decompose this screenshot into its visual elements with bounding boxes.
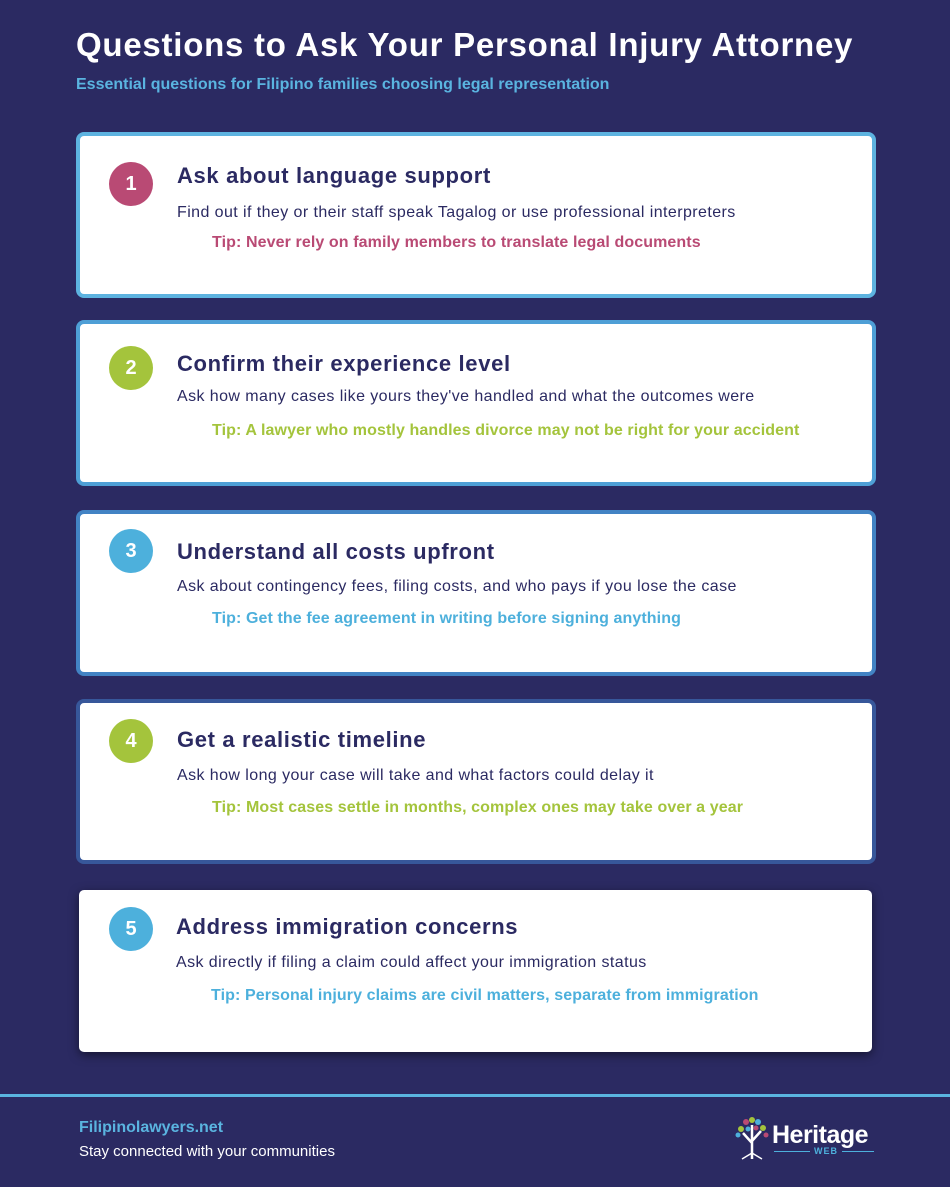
footer: website: Filipinolawyers.net — [79, 1119, 223, 1136]
icon: number 1 — [109, 162, 153, 206]
text 1: Find out if they or their staff speak Tagalog or use professional interpreters — [177, 204, 736, 221]
text 3: Ask about contingency fees, filing costs, and who pays if you lose the case — [177, 578, 737, 595]
logo text: Heritage — [772, 1121, 868, 1149]
tip 5: Tip: Personal injury claims are civil matters, separate from immigration — [211, 987, 759, 1004]
heading 1: Ask about language support — [177, 163, 491, 188]
tip 3: Tip: Get the fee agreement in writing before signing anything — [212, 610, 681, 627]
tip 2: Tip: A lawyer who mostly handles divorce may not be right for your accident — [212, 422, 799, 439]
panel: card 2 — [76, 320, 876, 486]
icon: number 3 — [109, 529, 153, 573]
logo: Heritage Web — [736, 1117, 874, 1160]
tip 4: Tip: Most cases settle in months, complex ones may take over a year — [212, 799, 743, 816]
footer: tagline: Stay connected with your communities — [79, 1143, 335, 1160]
heading 3: Understand all costs upfront — [177, 539, 495, 564]
panel: card 1 — [76, 132, 876, 298]
title: Questions to Ask Your Personal Injury Attorney — [76, 26, 853, 63]
heading 5: Address immigration concerns — [176, 914, 518, 939]
icon: number 2 — [109, 346, 153, 390]
panel: card 4 — [76, 699, 876, 864]
panel: card 3 — [76, 510, 876, 676]
icon: number 4 — [109, 719, 153, 763]
logo: Heritage Web: WEB — [814, 1146, 838, 1156]
heading 4: Get a realistic timeline — [177, 727, 426, 752]
icon: number 3: 3 — [125, 540, 137, 562]
icon: number 5: 5 — [125, 918, 137, 940]
tip 1: Tip: Never rely on family members to translate legal documents — [212, 234, 701, 251]
text 5: Ask directly if filing a claim could affect your immigration status — [176, 954, 647, 971]
icon: number 4: 4 — [125, 730, 137, 752]
text 4: Ask how long your case will take and what factors could delay it — [177, 767, 654, 784]
icon: number 2: 2 — [125, 357, 137, 379]
icon: tree — [736, 1117, 768, 1160]
icon: number 1: 1 — [125, 173, 137, 195]
panel: card 5 — [79, 890, 872, 1052]
icon: number 5 — [109, 907, 153, 951]
text 2: Ask how many cases like yours they've handled and what the outcomes were — [177, 388, 755, 405]
heading 2: Confirm their experience level — [177, 351, 511, 376]
subtitle: Essential questions for Filipino families choosing legal representation — [76, 76, 609, 93]
